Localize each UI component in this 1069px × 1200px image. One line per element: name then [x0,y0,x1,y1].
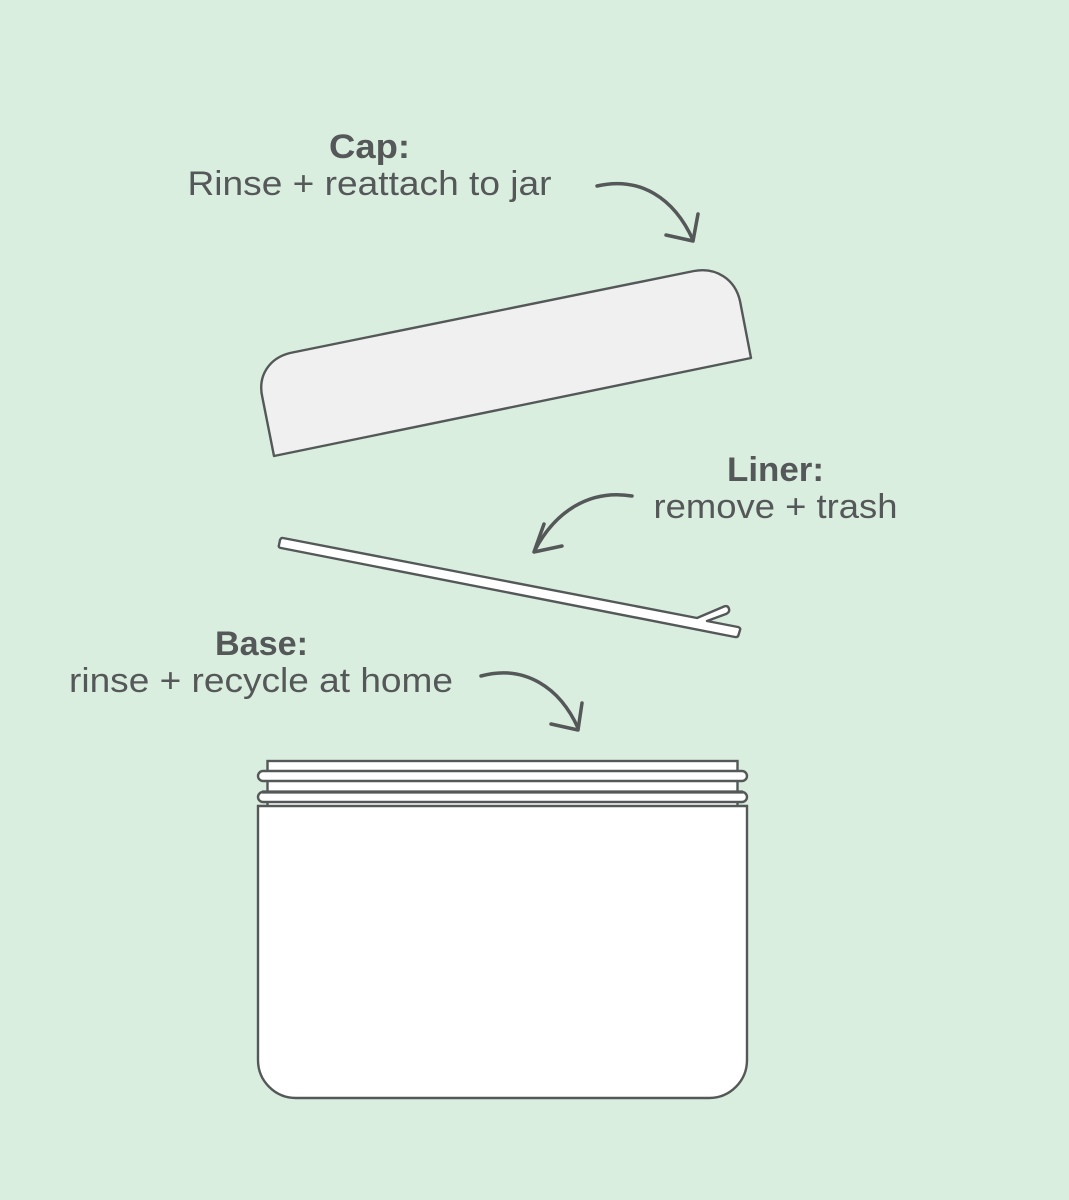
liner label: remove + trash [654,488,898,526]
base label: rinse + recycle at home [69,662,453,700]
arrow: liner [534,495,632,552]
icon: cap [261,270,751,456]
liner label: Liner: [727,451,824,489]
cap label [188,128,552,203]
arrow: cap [597,184,698,241]
cap label: Rinse + reattach to jar [188,165,552,203]
arrow: base [481,673,582,730]
base label: Base: [215,625,308,663]
base label [69,625,453,700]
cap label: Cap: [329,128,410,166]
icon: liner [279,538,740,637]
liner label [654,451,898,526]
icon: jar base [258,761,747,1098]
